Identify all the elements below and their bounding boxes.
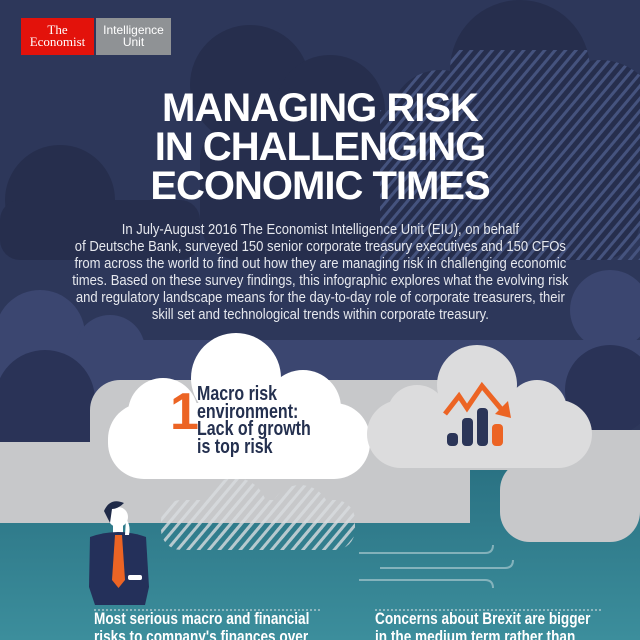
intro text: of Deutsche Bank, surveyed 150 senior corporate treasury executives and 150 CFOs bbox=[75, 238, 566, 255]
title: IN CHALLENGING bbox=[155, 125, 485, 169]
title: ECONOMIC TIMES bbox=[150, 164, 490, 208]
text: Brexit concerns bbox=[375, 609, 590, 640]
logo: The Economist: Economist bbox=[30, 34, 85, 49]
gray band bbox=[0, 380, 640, 542]
text: Brexit concerns: Concerns about Brexit are bigger bbox=[375, 609, 590, 628]
intro text: from across the world to find out how they are managing risk in challenging economic bbox=[74, 255, 566, 272]
hatched cloud under white cloud bbox=[161, 478, 355, 550]
intro text: and regulatory landscape means for the day-to-day role of corporate treasurers, their bbox=[76, 289, 565, 306]
icon: falling chart bbox=[445, 386, 511, 446]
teal ground bbox=[0, 470, 640, 640]
title bbox=[150, 86, 490, 208]
wind lines bbox=[359, 545, 513, 588]
logo: The Economist bbox=[21, 18, 94, 55]
intro text: In July-August 2016 The Economist Intelligence Unit (EIU), on behalf bbox=[122, 221, 519, 238]
heading: macro risk: is top risk bbox=[197, 436, 273, 458]
text: most serious risks: Most serious macro and financial bbox=[94, 609, 309, 628]
intro text: times. Based on these survey findings, this infographic explores what the evolving risk bbox=[72, 272, 568, 289]
text: most serious risks bbox=[94, 609, 309, 640]
gray cloud with chart icon bbox=[367, 345, 592, 468]
heading: macro risk bbox=[197, 383, 311, 458]
logo bbox=[21, 18, 171, 55]
heading: macro risk: Macro risk bbox=[197, 383, 277, 405]
white cloud: section 1 bbox=[108, 333, 370, 479]
intro text bbox=[72, 221, 568, 323]
title: MANAGING RISK bbox=[162, 86, 478, 130]
intro text: skill set and technological trends within corporate treasury. bbox=[152, 306, 489, 323]
dotted dividers bbox=[94, 609, 320, 611]
mid clouds bbox=[0, 270, 640, 400]
logo: Intelligence Unit: Unit bbox=[123, 35, 144, 49]
logo: The Economist: The bbox=[47, 22, 68, 37]
heading: macro risk: environment: bbox=[197, 401, 298, 423]
dark top clouds bbox=[0, 0, 640, 260]
number 1: 1 bbox=[170, 383, 199, 441]
heading: macro risk: Lack of growth bbox=[197, 418, 311, 440]
logo: Intelligence Unit: Intelligence bbox=[103, 23, 164, 37]
logo: Intelligence Unit bbox=[96, 18, 171, 55]
icon: businessman bbox=[89, 501, 149, 605]
